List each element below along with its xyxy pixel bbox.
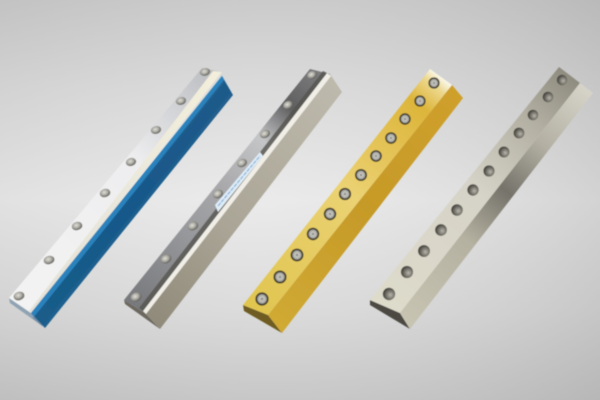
stainless air knife with label <box>124 69 342 329</box>
gold air knife <box>243 69 463 333</box>
screws <box>383 75 567 300</box>
screws <box>129 69 318 303</box>
top face <box>370 67 580 313</box>
blue air knife <box>9 67 233 328</box>
side face <box>145 74 342 329</box>
top face <box>9 68 222 313</box>
satin steel air knife <box>370 67 593 329</box>
side face <box>268 85 463 333</box>
screws <box>13 67 211 302</box>
top face <box>243 69 452 315</box>
screws <box>255 77 440 306</box>
blue side face <box>31 76 233 328</box>
sticker label <box>215 152 263 212</box>
side face <box>400 83 593 329</box>
top face <box>124 69 330 313</box>
